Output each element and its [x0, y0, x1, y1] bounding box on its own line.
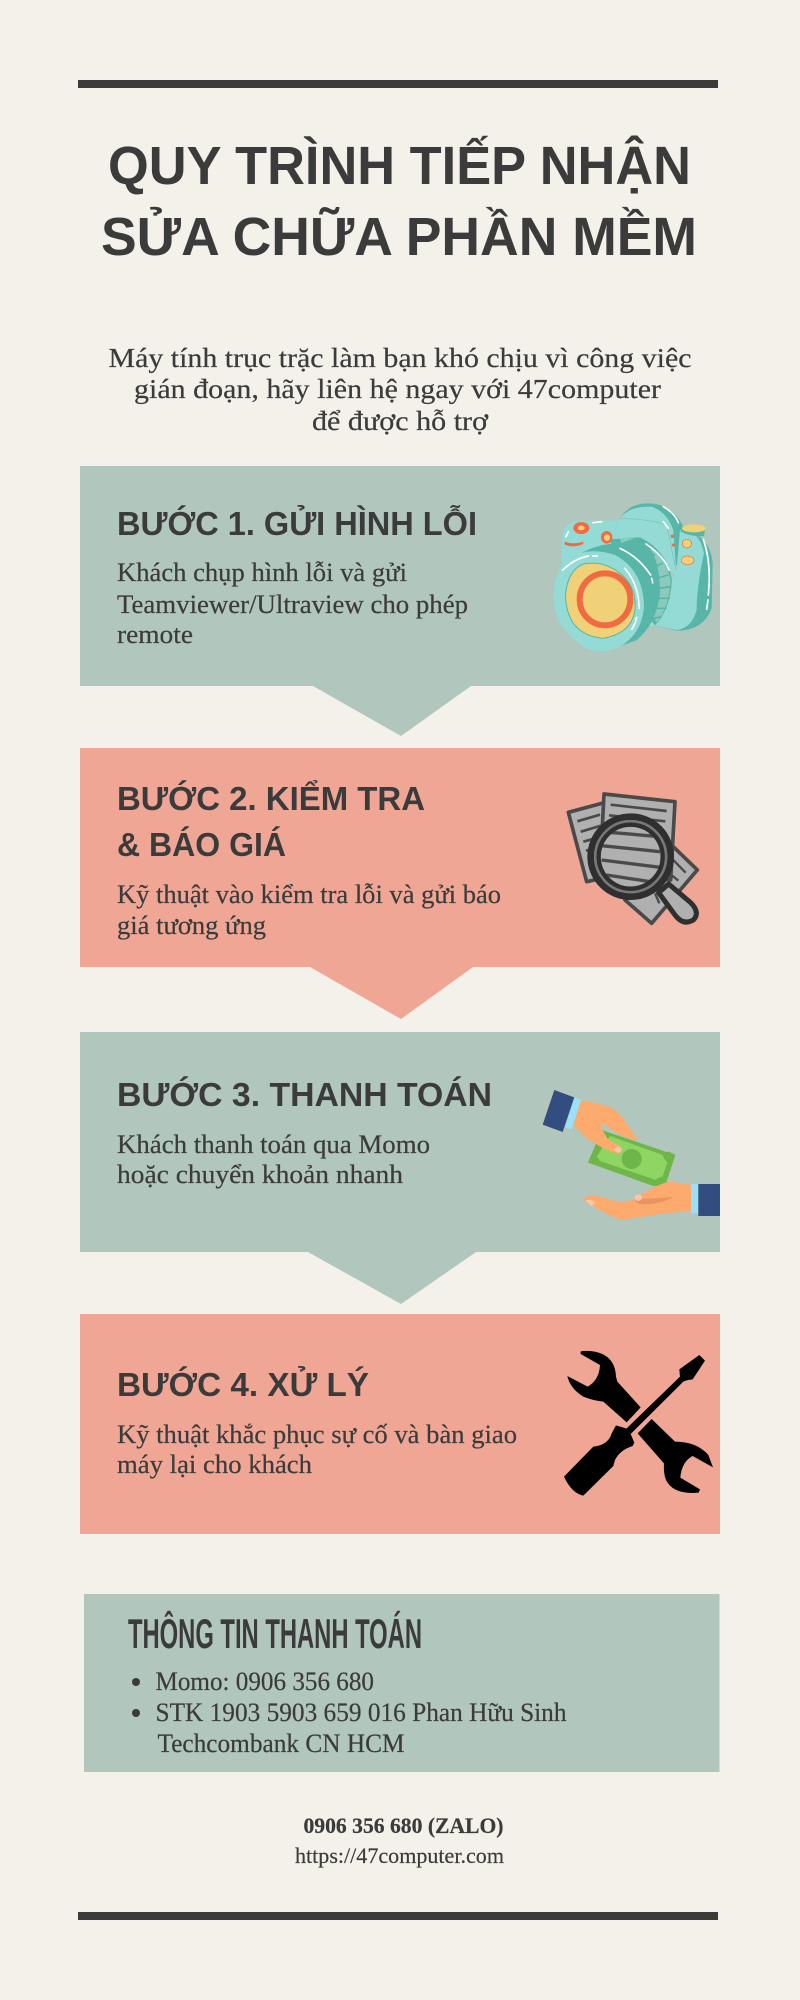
- step 4 text: [117, 1420, 517, 1479]
- step 2 heading: & BÁO GIÁ: [117, 826, 286, 864]
- step 3 text: [117, 1130, 430, 1189]
- step 2 text: Kỹ thuật vào kiểm tra lỗi và gửi báo: [117, 880, 501, 909]
- step 2 text: giá tương ứng: [117, 911, 266, 940]
- contact footer: 0906 356 680 (ZALO): [304, 1813, 504, 1838]
- step 4 text: máy lại cho khách: [117, 1450, 312, 1479]
- intro text: Máy tính trục trặc làm bạn khó chịu vì công việc: [108, 342, 692, 373]
- step 1 text: Khách chụp hình lỗi và gửi: [117, 558, 407, 587]
- icon: hands exchanging money: [543, 1090, 720, 1220]
- icon: wrench and screwdriver: [564, 1351, 713, 1496]
- panel: step 4: [80, 1314, 720, 1534]
- step 3 text: hoặc chuyển khoản nhanh: [117, 1160, 403, 1189]
- panel: step 2: [80, 748, 720, 1019]
- intro text: gián đoạn, hãy liên hệ ngay với 47computer: [134, 373, 661, 404]
- panel: step 3: [80, 1032, 720, 1304]
- title: SỬA CHỮA PHẦN MỀM: [101, 207, 697, 267]
- payment list: Techcombank CN HCM: [158, 1729, 404, 1758]
- step 2 heading: [117, 780, 425, 864]
- step 3 text: Khách thanh toán qua Momo: [117, 1130, 430, 1159]
- payment list: STK 1903 5903 659 016 Phan Hữu Sinh: [156, 1698, 566, 1727]
- title: QUY TRÌNH TIẾP NHẬN: [108, 135, 691, 196]
- bottom bar: [78, 1912, 718, 1920]
- step 1 text: Teamviewer/Ultraview cho phép: [117, 590, 468, 619]
- payment list: [132, 1667, 566, 1758]
- step 2 background with arrow: [80, 748, 720, 1019]
- top bar: [78, 80, 718, 88]
- intro text: [108, 342, 692, 436]
- step 1 background with arrow: [80, 466, 720, 736]
- step 1 text: remote: [117, 620, 193, 649]
- step 4 background: [80, 1314, 720, 1534]
- payment list: Momo: 0906 356 680: [156, 1667, 374, 1696]
- panel: payment information: [84, 1594, 720, 1772]
- step 4 heading: BƯỚC 4. XỬ LÝ: [117, 1366, 369, 1404]
- payment background: [84, 1594, 720, 1772]
- title: [101, 135, 697, 267]
- step 2 heading: BƯỚC 2. KIỂM TRA: [117, 780, 425, 818]
- step 3 background with arrow: [80, 1032, 720, 1304]
- icon: camera: [553, 503, 713, 651]
- contact footer: https://47computer.com: [295, 1843, 504, 1868]
- step 1 heading: BƯỚC 1. GỬI HÌNH LỖI: [117, 505, 477, 543]
- icon: magnifier over documents: [568, 794, 697, 923]
- step 1 text: [117, 558, 468, 649]
- panel: step 1: [80, 466, 720, 736]
- step 2 text: [117, 880, 501, 940]
- step 3 heading: BƯỚC 3. THANH TOÁN: [117, 1076, 492, 1114]
- intro text: để được hỗ trợ: [312, 405, 488, 436]
- contact footer: [295, 1813, 504, 1868]
- step 4 text: Kỹ thuật khắc phục sự cố và bàn giao: [117, 1420, 517, 1449]
- payment heading: THÔNG TIN THANH TOÁN: [128, 1609, 422, 1657]
